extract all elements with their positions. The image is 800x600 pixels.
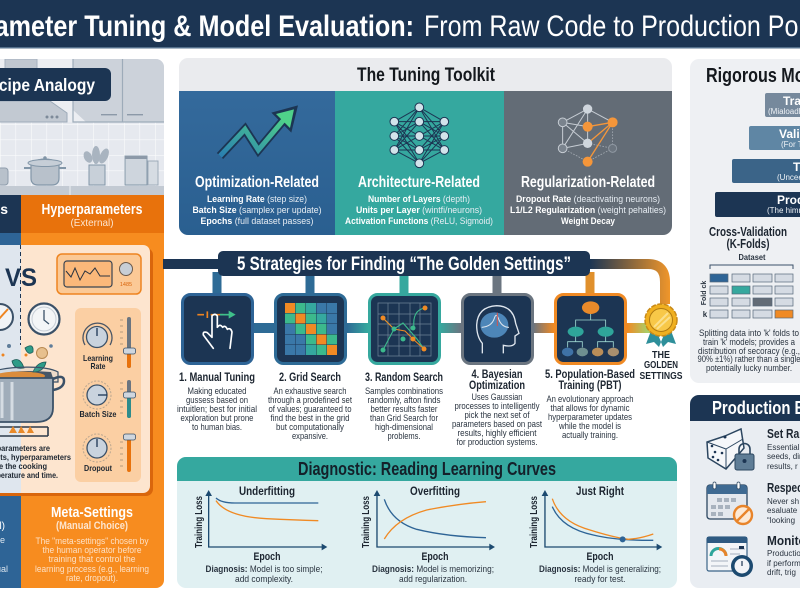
meta-settings text: (Manual Choice) (56, 520, 128, 532)
chart: overfitting: add regularization. (399, 574, 467, 584)
strategy 5: population-based training: hyperparameter updates (548, 412, 632, 422)
strategy 4: bayesian optimization: parameters based on past (452, 419, 542, 429)
chart: just right: Training Loss (529, 496, 540, 548)
dial: learning rate: Rate (90, 361, 106, 371)
column: architecture: Activation Functions (ReLU, Sigmoid) (345, 216, 493, 227)
practice: set random seeds: results, r (767, 462, 798, 471)
strategy 3: random search (365, 294, 443, 441)
icon: clock (28, 304, 60, 334)
icon: hand on slider (182, 294, 252, 364)
dial: batch size: Batch Size (80, 409, 117, 419)
toolkit heading: The Tuning Toolkit (357, 65, 496, 86)
chart: just right: Diagnosis: Model is generalizing; (539, 564, 661, 574)
header banner (0, 0, 800, 48)
column: optimization: Optimization-Related (195, 174, 319, 191)
strategies banner: 5 Strategies for Finding “The Golden Settings” (237, 254, 571, 275)
icon: heatmap grid (276, 294, 346, 364)
panel: recipe analogy (0, 59, 164, 588)
panel: the tuning toolkit (179, 58, 672, 235)
control board: dials and sliders (75, 308, 141, 482)
strategy 2: grid search: find the best in the grid (270, 413, 350, 423)
practice: monitor for drift: if perform (767, 559, 800, 568)
sliders (120, 317, 136, 472)
meta-settings text: training that control the (48, 554, 136, 564)
cooking comparison card (0, 245, 153, 496)
column: optimization: Learning Rate (step size) (207, 194, 307, 205)
chart: overfitting: Overfitting (410, 484, 460, 498)
strategy 5: population-based training: while the model is (558, 421, 621, 431)
strategy 3: random search: than Grid Search for (370, 413, 438, 423)
chart: underfitting: Diagnosis: Model is too simple; (206, 564, 322, 574)
column: regularization: L1/L2 Regularization (weight pehalties) (510, 205, 666, 216)
column: optimization: Batch Size (samplex per update) (192, 205, 322, 216)
icon: cooking pot (0, 344, 64, 436)
strategy 2: grid search: through a prodefined set (268, 395, 352, 405)
dial: dropout: Dropout (84, 463, 112, 473)
chart: underfitting: add complexity. (235, 574, 293, 584)
strategy 3: random search: better results faster (370, 404, 438, 414)
icon: rising arrow (220, 105, 298, 156)
cross-validation heading (709, 225, 787, 251)
strategy 4: bayesian optimization (452, 294, 542, 447)
strategy 4: bayesian optimization: for production systems. (456, 437, 538, 447)
strategy 5: population-based training: Training (PBT) (558, 378, 622, 392)
chart: just right: Just Right (576, 484, 624, 498)
icon: random scatter grid (370, 294, 440, 364)
column: architecture: Architecture-Related (358, 174, 480, 191)
left header: parameters (0, 195, 21, 588)
chart: just right (529, 484, 662, 584)
panel: rigorous model evaluation (690, 59, 800, 383)
strategy 2: grid search: of values; guaranteed to (268, 404, 352, 414)
practice: monitor for drift: drift, trig (767, 568, 796, 577)
chart: overfitting (361, 484, 495, 584)
chart: underfitting: Training Loss (194, 496, 205, 548)
strategy 5: population-based training: actually training. (562, 430, 618, 440)
column: architecture (335, 91, 504, 235)
strategy 2: grid search: An exhaustive search (274, 386, 346, 396)
strategy 5: population-based training: 5. Population-Based (545, 367, 635, 381)
chart: underfitting: Underfitting (239, 484, 295, 498)
panel: production best practices (690, 395, 800, 588)
meta-settings text: rate, dropout). (66, 573, 118, 583)
chart: just right: ready for test. (574, 574, 626, 584)
practice: respect the test set: Never sh (767, 497, 799, 506)
panel: diagnostic learning curves (177, 457, 677, 588)
analogy caption (0, 446, 71, 478)
strategy 4: bayesian optimization: processes to intelligently (454, 401, 540, 411)
practice: respect the test set: esaluate (767, 506, 798, 515)
strategy 1: manual tuning: intuitlen; best for initial (177, 404, 257, 414)
icon: dropout network (558, 104, 618, 167)
column: optimization (179, 91, 335, 235)
k-fold diagram: k (703, 310, 708, 319)
kitchen illustration (0, 59, 164, 195)
icon: neural network (390, 103, 449, 168)
vs label: VS (5, 264, 37, 292)
practice: respect the test set (707, 480, 800, 525)
dial: dropout (83, 434, 112, 473)
strategy 4: bayesian optimization: Optimization (469, 378, 525, 392)
meta-settings text (35, 504, 149, 583)
strategy 5: population-based training: An evolutionary approach (546, 394, 634, 404)
strategy 3: random search: problems. (388, 431, 420, 441)
practice: set random seeds: Essential (767, 443, 800, 452)
cross-validation caption (698, 328, 800, 373)
column: regularization: Weight Decay (561, 216, 616, 227)
golden settings medal (640, 304, 682, 382)
meta-settings text: The "meta-settings" chosen by (36, 536, 149, 546)
chart: underfitting (194, 484, 327, 584)
chart: overfitting: Epoch (422, 551, 449, 563)
right header: hyperparameters: (External) (70, 217, 114, 229)
golden settings medal: THE (652, 349, 670, 361)
connector pipes (163, 259, 665, 333)
column: regularization: Dropout Rate (deactivating neurons) (516, 194, 660, 205)
chart: just right: Epoch (586, 551, 614, 563)
data pyramid: (Mialoadl (768, 107, 800, 116)
chart: underfitting: Epoch (254, 551, 281, 563)
strategy 3: random search: randomly, afton finds (368, 395, 441, 405)
strategy 4: bayesian optimization: results, highly efficient (458, 428, 537, 438)
chart: overfitting: Training Loss (361, 496, 372, 548)
icon: dice and lock (707, 429, 754, 470)
icon: gauge (0, 304, 13, 330)
k-fold diagram (701, 252, 793, 319)
column: regularization (504, 91, 672, 235)
strategy 1: manual tuning: exploration but prone (180, 413, 254, 423)
strategy 2: grid search: but computationally (276, 422, 344, 432)
strategy 4: bayesian optimization: pick the next set of (464, 410, 530, 420)
dial: batch size (80, 381, 117, 419)
left text: internal parameters (0, 522, 8, 572)
strategies banner (218, 251, 590, 276)
icon: head with brain (462, 294, 532, 364)
icon: medal (645, 304, 677, 347)
strategy 5: population-based training (545, 294, 635, 440)
right header: hyperparameters: Hyperparameters (42, 202, 142, 218)
strategy 3: random search: Samples combinations (365, 386, 443, 396)
practice: monitor for drift (707, 533, 800, 577)
golden settings medal: SETTINGS (640, 370, 682, 382)
strategy 2: grid search (268, 294, 352, 441)
cross-validation heading: (K-Folds) (726, 237, 770, 251)
meta-settings text: learning process (e.g., learning (35, 564, 149, 574)
right header: hyperparameters (21, 195, 164, 588)
meta-settings text: Meta-Settings (51, 504, 133, 521)
column: optimization: Epochs (full dataset passes) (200, 216, 314, 227)
strategy 2: grid search: expansive. (292, 431, 328, 441)
column: architecture: Number of Layers (depth) (368, 194, 470, 205)
k-fold diagram: Fold ck (701, 281, 708, 305)
strategy 1: manual tuning: to human bias. (192, 422, 242, 432)
strategy 1: manual tuning: gussess based on (186, 395, 248, 405)
strategy 4: bayesian optimization: 4. Bayesian (472, 367, 522, 381)
golden settings medal: GOLDEN (644, 359, 678, 371)
strategy 1: manual tuning: 1. Manual Tuning (179, 370, 255, 384)
diagnostic heading: Diagnostic: Reading Learning Curves (298, 459, 556, 479)
dial: learning rate (83, 323, 113, 371)
strategy 5: population-based training: that allows for dynamic (550, 403, 630, 413)
strategy 3: random search: 3. Random Search (365, 370, 443, 384)
meta-settings text: the human operator before (42, 545, 142, 555)
icon: dashboard with stopwatch (707, 537, 753, 577)
icon: monitor (57, 254, 141, 294)
dial: learning rate: Learning (83, 353, 113, 363)
strategy 2: grid search: 2. Grid Search (279, 370, 341, 384)
icon: calendar with prohibition (707, 482, 752, 524)
strategy 1: manual tuning (177, 294, 257, 432)
practice: respect the test set: “looking (767, 516, 795, 525)
practice: monitor for drift: Productio (767, 549, 800, 558)
chart: overfitting: Diagnosis: Model is memorizing; (372, 564, 494, 574)
recipe analogy pill (0, 68, 111, 101)
icon: brain tree (556, 294, 626, 364)
strategy 3: random search: high-dimensional (375, 422, 433, 432)
k-fold diagram: Dataset (738, 252, 766, 262)
column: regularization: Regularization-Related (521, 174, 655, 191)
practice: set random seeds (707, 426, 800, 471)
strategy 4: bayesian optimization: Uses Gaussian (472, 392, 522, 402)
icon: monitor: 1485 (120, 282, 132, 288)
strategy 1: manual tuning: Making educated (188, 386, 246, 396)
column: architecture: Units per Layer (wintfi/neurons) (356, 205, 482, 216)
data pyramid (715, 93, 800, 217)
